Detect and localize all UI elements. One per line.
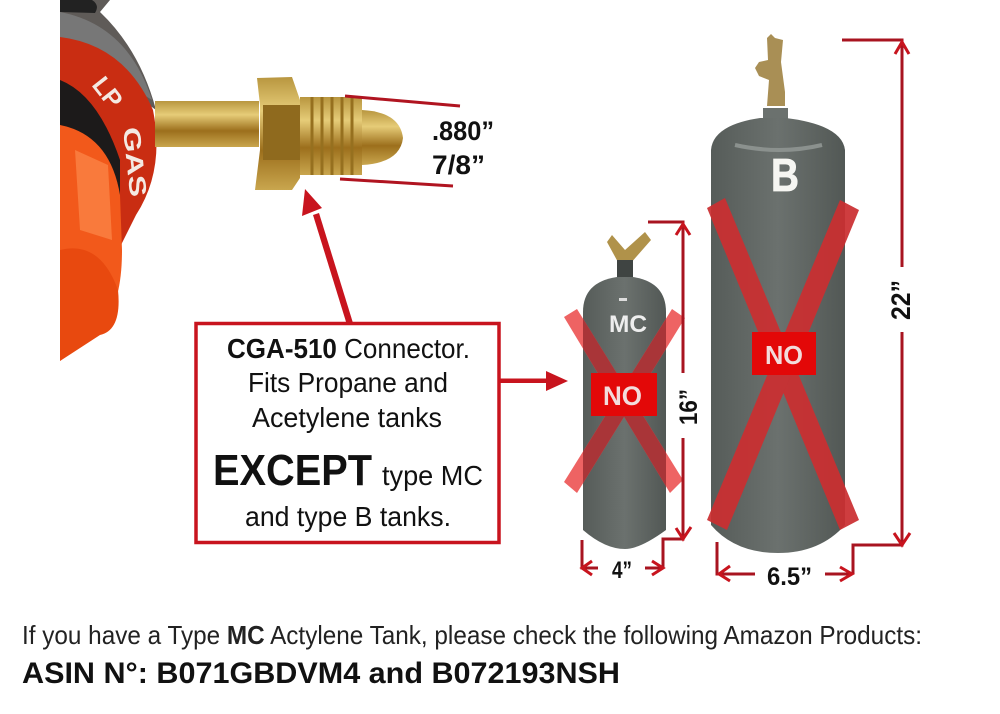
tank: B [707,34,859,553]
callout text: Acetylene tanks [252,402,442,433]
hex nut [255,77,300,190]
callout text: and type B tanks. [245,501,451,532]
threaded section [300,97,362,175]
B valve [755,34,788,120]
label 4 inch: 4” [612,557,632,584]
B cross [707,198,859,530]
footer note: If you have a Type MC Actylene Tank, please check the following Amazon Products: [22,620,922,650]
brass tube [155,101,259,147]
arrow: callout to MC tank [500,371,568,391]
B top highlight [735,145,822,150]
connector dimension text [432,116,494,180]
dimension lines: connector [340,96,460,186]
LP GAS label [86,71,151,198]
MC label: MC [609,311,647,338]
connector tip [362,110,403,165]
label 6.5 inch: 6.5” [767,563,812,591]
MC valve [607,232,651,278]
connector dimension text: 7/8” [432,150,485,180]
MC cross on tank [583,319,666,486]
LP GAS label: GAS [117,126,151,198]
callout text: Fits Propane and [248,367,448,398]
LP GAS label: LP [86,71,128,114]
dimension: B height [717,40,916,591]
callout text: type MC [382,460,483,491]
tank: MC [564,232,685,549]
connector dimension text: .880” [432,116,494,146]
regulator body [60,0,157,361]
B NO badge: NO [765,340,803,370]
MC NO badge [591,373,657,416]
arrow: callout to connector [302,189,353,325]
MC tank body [583,277,666,549]
photo: LP gas regulator and brass connector [60,0,403,361]
label 16 inch: 16” [675,389,703,425]
label 22 inch: 22” [886,280,916,320]
callout text: EXCEPT [213,446,372,495]
B tank body [711,118,845,553]
footer ASIN line: ASIN N°: B071GBDVM4 and B072193NSH [22,657,620,690]
callout text [213,333,483,532]
MC NO badge: NO [603,381,642,411]
dimension: MC height [582,222,703,584]
callout box [196,324,499,542]
callout text: CGA-510 Connector. [227,333,470,364]
B NO badge [752,332,816,375]
MC cross outer [564,309,685,493]
B label: B [771,149,799,201]
MC small mark [619,298,627,301]
